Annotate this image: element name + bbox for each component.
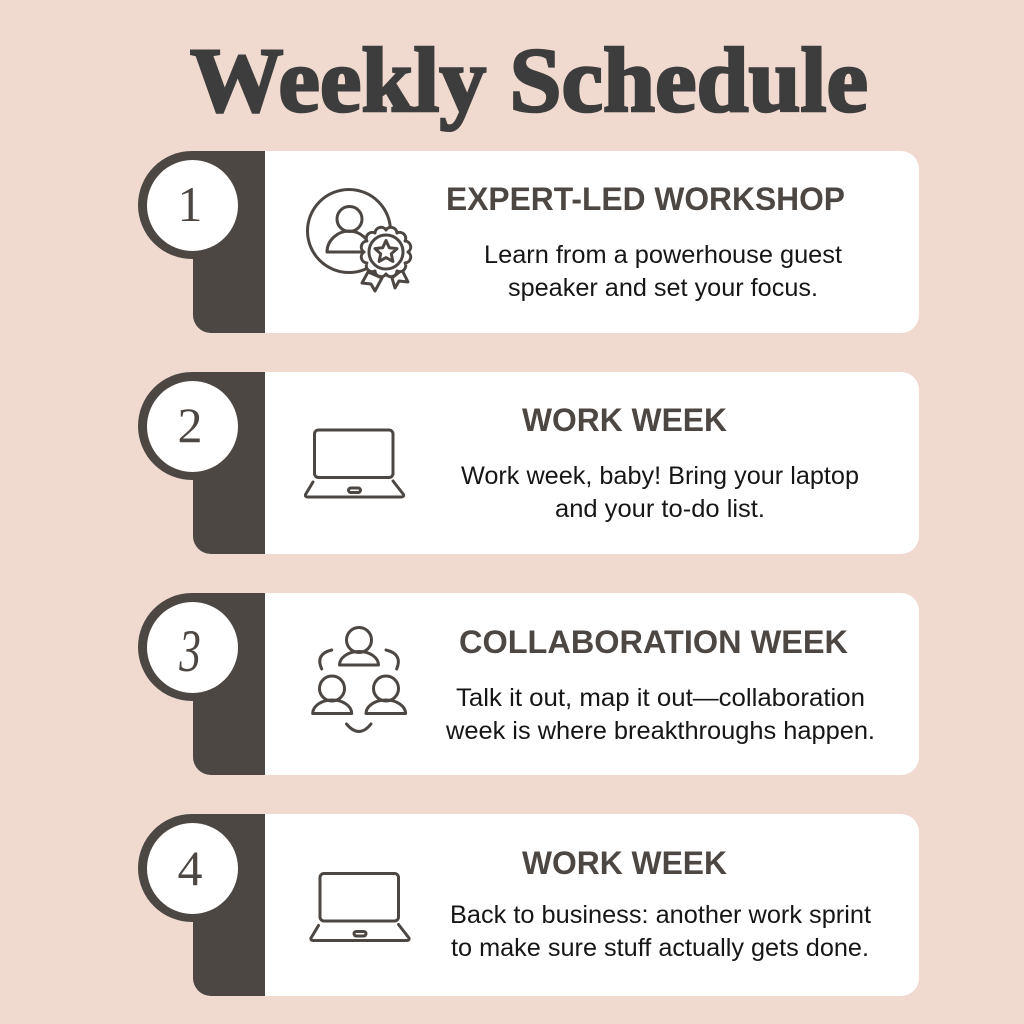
heading: COLLABORATION WEEK — [459, 624, 848, 660]
description: week is where breakthroughs happen. — [445, 717, 875, 745]
panel: step 2 work week — [138, 372, 919, 554]
number 4: 4 — [178, 840, 202, 896]
description — [445, 684, 875, 745]
heading: WORK WEEK — [522, 402, 727, 438]
description — [461, 462, 859, 523]
icon: expert with award badge — [308, 190, 411, 291]
panel: step 1 expert-led workshop — [138, 151, 919, 333]
heading: EXPERT-LED WORKSHOP — [446, 181, 845, 217]
description: Back to business: another work sprint — [450, 901, 871, 929]
icon: group of three people — [313, 628, 406, 732]
icon: laptop — [311, 874, 409, 940]
description: Learn from a powerhouse guest — [484, 241, 842, 269]
title: Weekly Schedule — [190, 29, 868, 131]
panel: step 3 collaboration week — [138, 593, 919, 775]
number 3: 3 — [178, 618, 201, 685]
heading: WORK WEEK — [522, 845, 727, 881]
description: Work week, baby! Bring your laptop — [461, 462, 859, 490]
number 2: 2 — [178, 397, 202, 453]
icon: laptop — [305, 430, 404, 497]
description: Talk it out, map it out—collaboration — [456, 684, 865, 712]
description — [484, 241, 842, 302]
description — [450, 901, 871, 962]
description: and your to-do list. — [555, 495, 765, 523]
panel: step 4 work week — [138, 814, 919, 996]
number 1: 1 — [178, 176, 202, 232]
description: to make sure stuff actually gets done. — [451, 934, 869, 962]
description: speaker and set your focus. — [508, 274, 818, 302]
